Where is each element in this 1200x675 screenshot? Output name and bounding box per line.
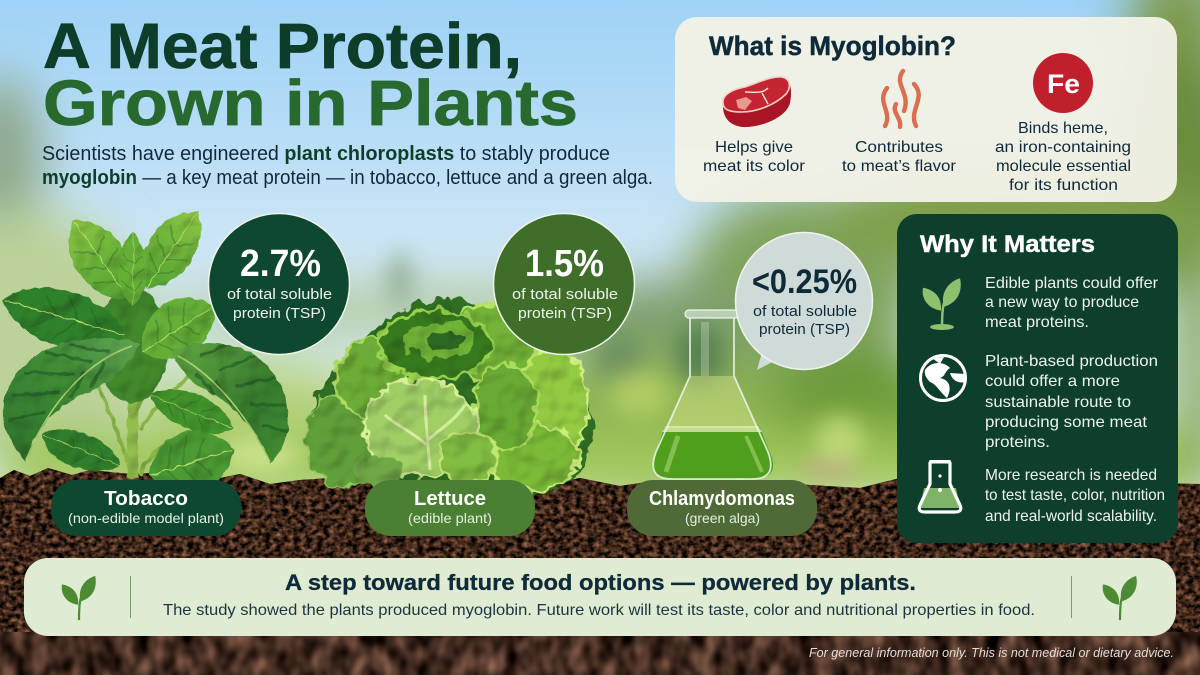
- text: more research: More research is needed: [985, 467, 1157, 484]
- badge: tobacco 2.7%: of total soluble: [227, 286, 332, 303]
- icon: seedling: [923, 278, 961, 330]
- badge: tobacco 2.7%: protein (TSP): [233, 305, 326, 322]
- label: tobacco: (non-edible model plant): [68, 510, 224, 526]
- text: plant-based production: [985, 353, 1158, 451]
- icon: left sprout: [62, 576, 96, 620]
- text: heme: an iron-containing: [995, 139, 1131, 156]
- icon: steam: [883, 71, 919, 127]
- text: edible plants: a new way to produce: [985, 294, 1139, 311]
- text: plant-based production: proteins.: [985, 434, 1050, 451]
- badge: lettuce 1.5%: of total soluble: [512, 286, 618, 303]
- label: lettuce: Lettuce: [414, 488, 486, 510]
- text: heme: molecule essential: [996, 158, 1131, 175]
- badge: lettuce 1.5%: 1.5%: [525, 243, 604, 285]
- icon: iron Fe: Fe: [1047, 69, 1080, 99]
- text: more research: to test taste, color, nutrition: [985, 487, 1165, 504]
- label: chlamydomonas: [627, 480, 817, 536]
- intro text: [42, 143, 653, 189]
- text: color: [703, 139, 806, 175]
- intro text: myoglobin — a key meat protein — in tobacco, lettuce and a green alga.: [42, 167, 653, 189]
- text: flavor: Contributes: [855, 139, 943, 156]
- text: flavor: [842, 139, 957, 175]
- text: heme: Binds heme,: [1018, 120, 1108, 137]
- lettuce illustration: [305, 299, 592, 495]
- tobacco plant illustration: [0, 198, 289, 504]
- panel: footer callout: [24, 558, 1176, 636]
- text: more research: [985, 467, 1165, 525]
- label: chlamydomonas: (green alga): [685, 510, 760, 526]
- text: color: meat its color: [703, 158, 806, 175]
- text: color: Helps give: [715, 139, 793, 156]
- heading: what is myoglobin: What is Myoglobin?: [709, 31, 956, 61]
- title: [43, 10, 578, 139]
- label: tobacco: Tobacco: [104, 488, 188, 510]
- icon: steak: [723, 77, 791, 127]
- badge: alga under 0.25%: protein (TSP): [759, 321, 850, 338]
- label: lettuce: (edible plant): [408, 510, 492, 526]
- badge: alga under 0.25%: [736, 232, 872, 370]
- label: lettuce: [365, 480, 535, 536]
- text: plant-based production: sustainable route to: [985, 394, 1131, 411]
- disclaimer: For general information only. This is not medical or dietary advice.: [809, 646, 1174, 660]
- text: flavor: to meat’s flavor: [842, 158, 957, 175]
- badge: lettuce 1.5%: [494, 214, 634, 354]
- icon: iron Fe: [1033, 53, 1093, 113]
- badge: alga under 0.25%: <0.25%: [752, 263, 857, 301]
- text: plant-based production: producing some meat: [985, 414, 1148, 431]
- text: plant-based production: could offer a more: [985, 373, 1120, 390]
- label: chlamydomonas: Chlamydomonas: [649, 488, 795, 510]
- badge: tobacco 2.7%: [208, 214, 350, 354]
- panel: what is myoglobin: [675, 17, 1177, 202]
- text: heme: [995, 120, 1131, 194]
- icon: lab flask: [919, 460, 961, 512]
- text: edible plants: Edible plants could offer: [985, 275, 1159, 292]
- intro text: Scientists have engineered plant chloroplasts to stably produce: [42, 143, 610, 165]
- text: more research: and real-world scalability.: [985, 508, 1157, 525]
- title: A Meat Protein,: [43, 10, 522, 82]
- footer heading: A step toward future food options — powered by plants.: [285, 570, 916, 595]
- heading: why it matters: Why It Matters: [920, 231, 1095, 258]
- footer text: The study showed the plants produced myoglobin. Future work will test its taste, color and nutritional properties in food.: [163, 602, 1035, 619]
- badge: tobacco 2.7%: 2.7%: [240, 243, 321, 285]
- flask of green alga culture: [653, 310, 773, 479]
- badge: alga under 0.25%: of total soluble: [753, 303, 857, 320]
- text: edible plants: [985, 275, 1159, 331]
- text: heme: for its function: [1009, 177, 1118, 194]
- icon: right sprout: [1103, 576, 1137, 620]
- label: tobacco: [51, 480, 241, 536]
- panel: why it matters: [897, 214, 1178, 543]
- icon: globe: [920, 356, 966, 400]
- text: plant-based production: Plant-based production: [985, 353, 1158, 370]
- badge: lettuce 1.5%: protein (TSP): [518, 305, 612, 322]
- title: Grown in Plants: [43, 67, 578, 139]
- text: edible plants: meat proteins.: [985, 314, 1089, 331]
